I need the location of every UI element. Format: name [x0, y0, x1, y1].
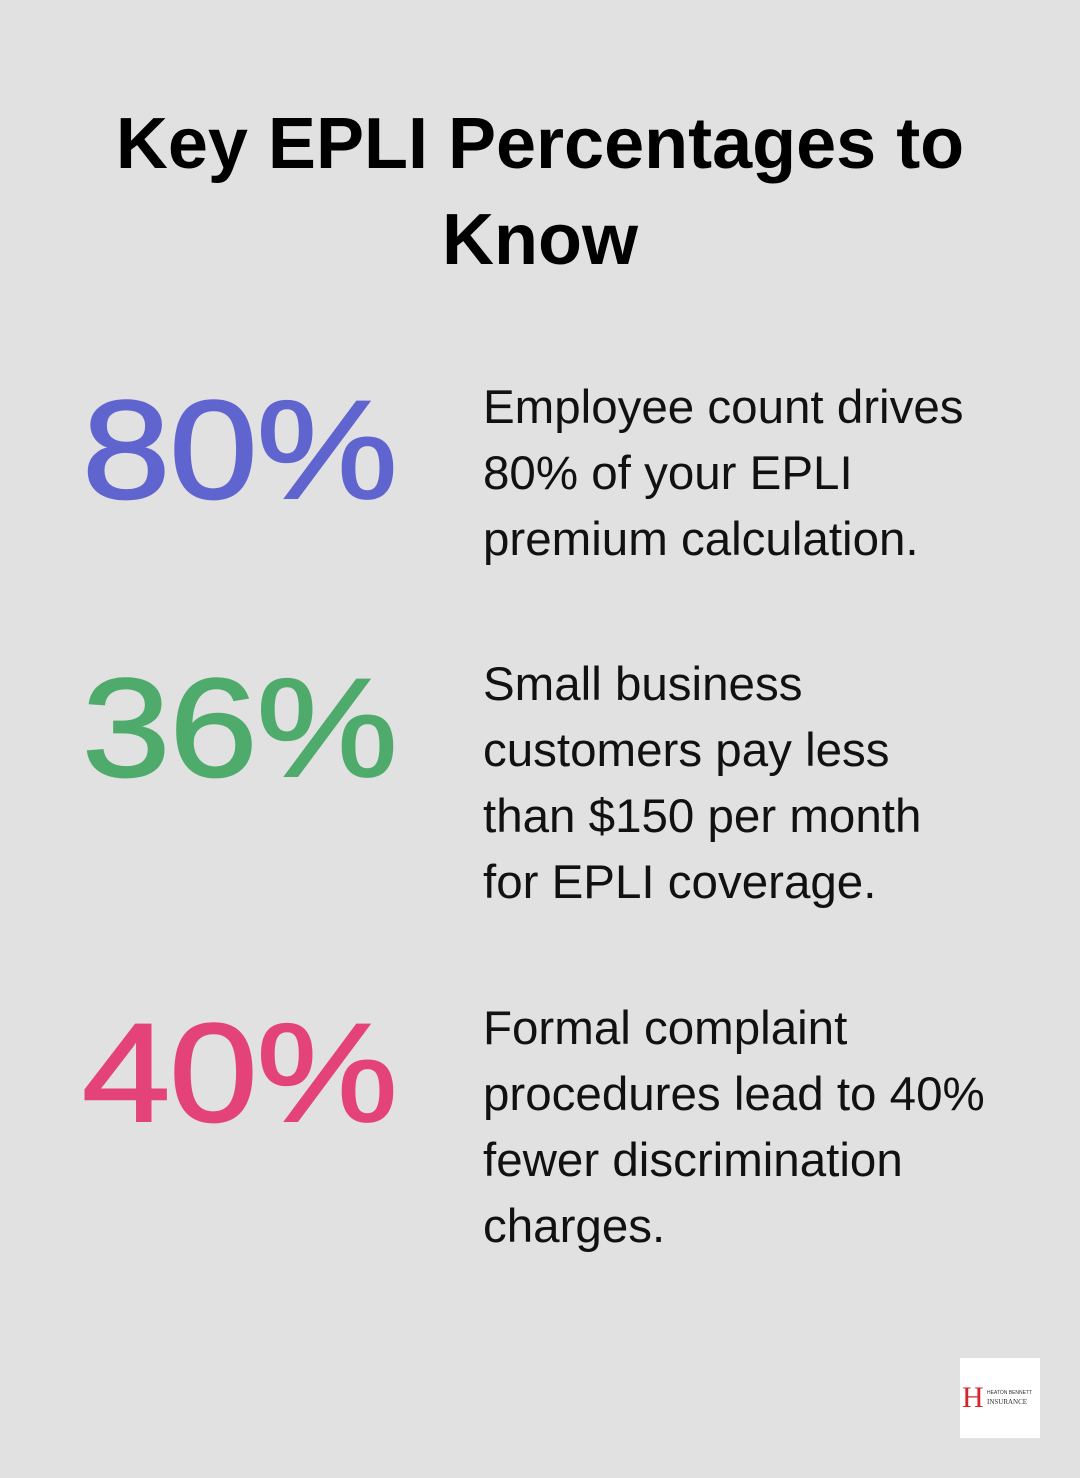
text: 36% description: customers pay less: [483, 724, 890, 777]
text: 40% description: procedures lead to 40%: [483, 1068, 985, 1121]
text: 80% description: Employee count drives: [483, 381, 964, 434]
stat: 80%: 80%: [82, 371, 397, 528]
text: 40% description: fewer discrimination: [483, 1134, 903, 1187]
logo: INSURANCE: [987, 1398, 1027, 1406]
text: 36% description: [483, 658, 921, 909]
title: [116, 104, 964, 280]
title: Key EPLI Percentages to: [116, 104, 964, 184]
stat: 36%: 36%: [82, 649, 397, 806]
text: 36% description: for EPLI coverage.: [483, 856, 876, 909]
text: 40% description: [483, 1002, 985, 1253]
text: 80% description: 80% of your EPLI: [483, 447, 853, 500]
text: 36% description: than $150 per month: [483, 790, 921, 843]
text: 80% description: [483, 381, 964, 566]
logo: [960, 1358, 1040, 1438]
stat: 40%: 40%: [82, 994, 397, 1151]
text: 40% description: Formal complaint: [483, 1002, 847, 1055]
logo: H: [962, 1381, 984, 1414]
logo: HEATON BENNETT: [987, 1390, 1032, 1396]
text: 36% description: Small business: [483, 658, 802, 711]
text: 80% description: premium calculation.: [483, 513, 919, 566]
title: Know: [442, 200, 638, 280]
text: 40% description: charges.: [483, 1200, 665, 1253]
